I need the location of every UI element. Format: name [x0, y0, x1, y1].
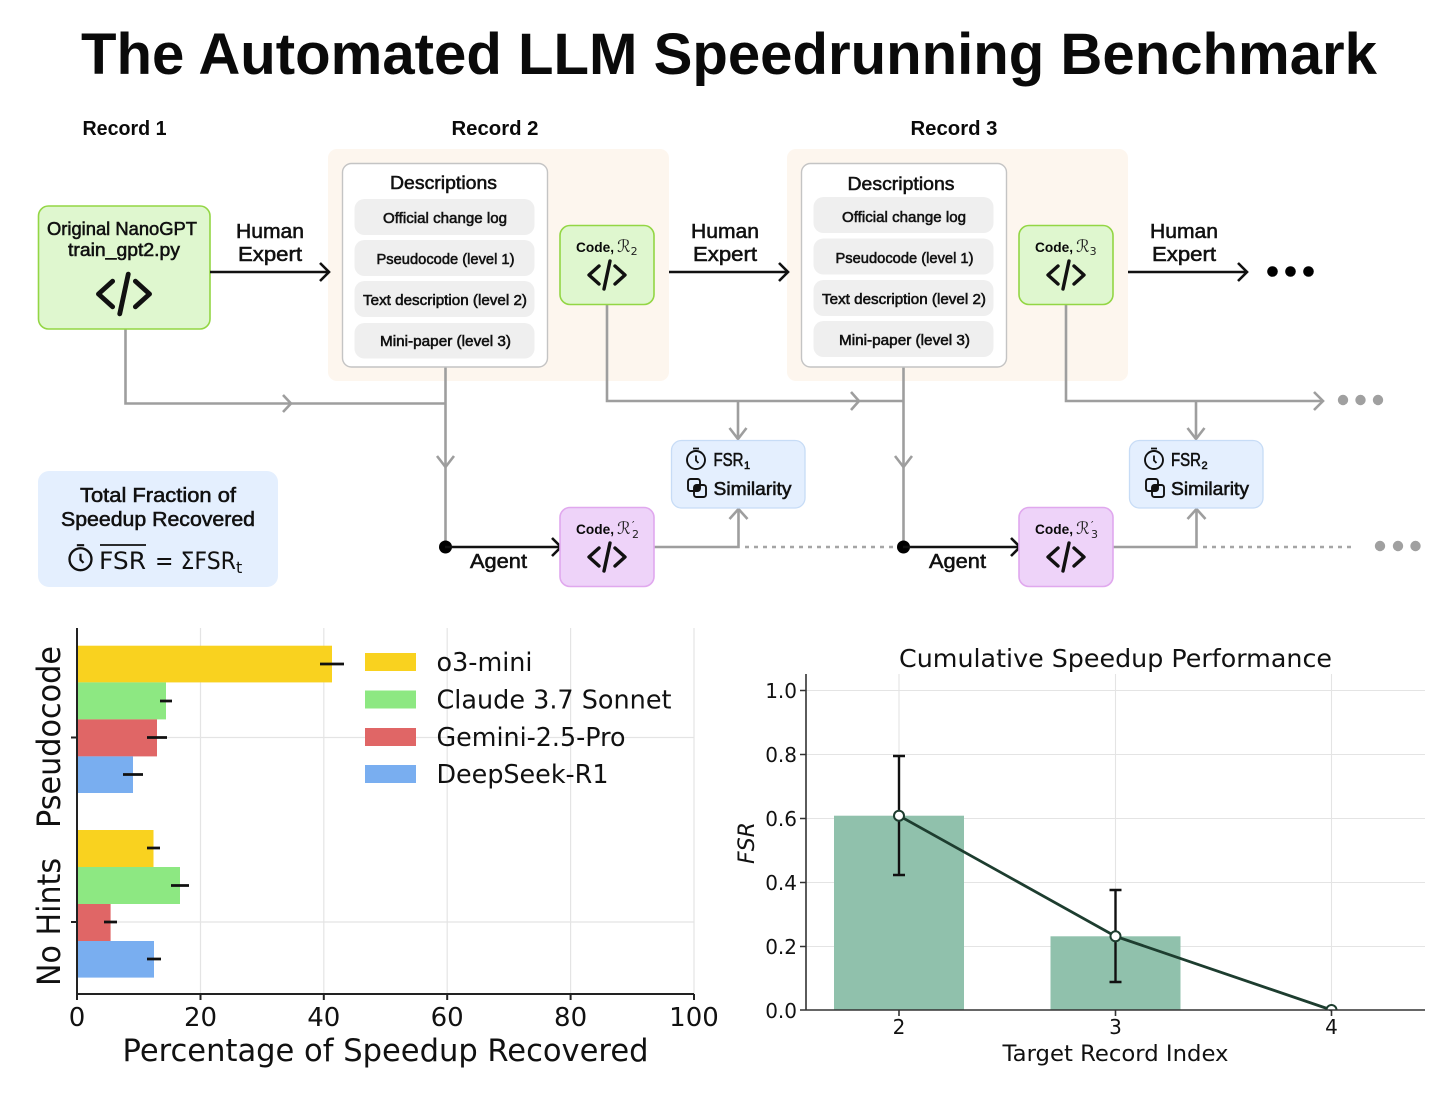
- box: code R3 prime: ℛ: [1076, 519, 1090, 539]
- y tick labels: 0.4: [765, 871, 797, 895]
- y tick labels: 0.2: [765, 935, 797, 959]
- legend: Gemini-2.5-Pro: [436, 723, 626, 753]
- icon: code: [98, 274, 150, 314]
- panel: total fraction of speedup: = ΣFSR: [155, 547, 236, 575]
- x tick labels: 40: [307, 1003, 340, 1033]
- arrow: human expert 1: Expert: [238, 244, 302, 266]
- error bars: [104, 664, 344, 959]
- panel: descriptions record 2: Pseudocode (level 1): [376, 252, 514, 268]
- box: code R2: Code,: [576, 239, 614, 255]
- arrow: human expert 3: Human: [1150, 221, 1218, 243]
- heading: Record 1: Record 1: [82, 118, 166, 140]
- box: code R3: 3: [1090, 245, 1097, 258]
- ellipsis: bottom row: [1375, 541, 1421, 551]
- x tick labels: 3: [1109, 1015, 1122, 1039]
- box: Original NanoGPT: [38, 206, 210, 329]
- x axis label: Target Record Index: [1001, 1042, 1228, 1067]
- bars: [834, 816, 1180, 1010]
- box: FSR 2 and similarity: 2: [1202, 460, 1208, 472]
- icon: code: [1048, 543, 1084, 571]
- panel: total fraction of speedup: t: [236, 558, 242, 577]
- heading: Record 3: Record 3: [910, 118, 998, 140]
- icon: code: [1048, 261, 1084, 289]
- panel: descriptions record 3: Descriptions: [848, 174, 954, 194]
- arrow: human expert 3: [1128, 221, 1247, 281]
- panel: descriptions record 2: Text description (level 2): [363, 293, 527, 309]
- arrow: human expert 1: [210, 221, 329, 281]
- box: code R2 prime: [560, 508, 654, 586]
- ellipsis: middle row: [1338, 395, 1383, 405]
- box: Original NanoGPT: train_gpt2.py: [68, 240, 180, 261]
- x tick labels: 0: [69, 1003, 85, 1033]
- box: code R2: ℛ: [617, 237, 631, 257]
- box: FSR 1 and similarity: FSR: [714, 450, 744, 470]
- box: code R3 prime: Code,: [1035, 521, 1073, 537]
- legend: DeepSeek-R1: [436, 760, 608, 790]
- bar chart: percentage of speedup recovered: [30, 628, 719, 1069]
- y axis label: FSR: [735, 822, 760, 864]
- icon: stopwatch: [687, 448, 705, 469]
- icon: similarity: [1146, 479, 1164, 497]
- agent arrow 1: [439, 538, 561, 573]
- arrow: human expert 2: Human: [691, 221, 759, 243]
- y tick labels: [765, 679, 797, 1023]
- panel: total fraction of speedup: Speedup Recovered: [61, 509, 255, 531]
- connectors: gray flow lines: [126, 304, 1355, 547]
- arrow: human expert 1: Human: [236, 221, 304, 243]
- y tick labels: 0.8: [765, 743, 797, 767]
- chart title: Cumulative Speedup Performance: [899, 644, 1332, 673]
- x tick labels: [893, 1015, 1338, 1039]
- box: FSR 1 and similarity: 1: [744, 460, 750, 472]
- agent arrow 1: Agent: [470, 551, 527, 573]
- panel: descriptions record 2: Official change log: [383, 211, 507, 227]
- panel: total fraction of speedup: Total Fraction of: [80, 485, 236, 507]
- box: code R2 prime: ′: [632, 519, 635, 532]
- icon: stopwatch: [70, 545, 91, 570]
- box: code R2 prime: ℛ: [617, 519, 631, 539]
- panel: descriptions record 2: Descriptions: [390, 173, 497, 193]
- box: code R3 prime: [1019, 508, 1113, 586]
- x tick labels: 4: [1325, 1015, 1338, 1039]
- x axis label: Percentage of Speedup Recovered: [122, 1033, 648, 1069]
- y tick labels: 0.0: [765, 999, 797, 1023]
- box: FSR 2 and similarity: [1130, 440, 1263, 508]
- panel: descriptions record 2: Mini-paper (level 3): [380, 334, 511, 350]
- box: FSR 2 and similarity: Similarity: [1171, 479, 1249, 499]
- icon: code: [589, 261, 625, 289]
- y tick labels: 0.6: [765, 807, 797, 831]
- box: code R3: [1019, 226, 1113, 304]
- arrow: human expert 2: Expert: [693, 244, 757, 266]
- box: FSR 1 and similarity: Similarity: [714, 479, 792, 499]
- panel: descriptions record 2: [342, 164, 548, 367]
- heading: Record 2: Record 2: [452, 118, 538, 140]
- x tick labels: 60: [431, 1003, 464, 1033]
- box: code R2 prime: Code,: [576, 521, 614, 537]
- legend: [365, 648, 672, 790]
- x tick labels: 100: [669, 1003, 719, 1033]
- box: Original NanoGPT: Original NanoGPT: [47, 219, 197, 239]
- icon: code: [589, 543, 625, 571]
- x tick labels: 2: [893, 1015, 905, 1039]
- x tick labels: [69, 1003, 719, 1033]
- panel: descriptions record 3: [802, 164, 1006, 367]
- legend: Claude 3.7 Sonnet: [436, 686, 672, 716]
- box: code R3: ℛ: [1076, 237, 1090, 257]
- title: The Automated LLM Speedrunning Benchmark: [81, 22, 1378, 87]
- agent arrow 2: [897, 538, 1020, 573]
- panel: descriptions record 3: Mini-paper (level 3): [839, 333, 970, 349]
- axes: [71, 628, 694, 1000]
- y category label: Pseudocode: Pseudocode: [30, 646, 68, 828]
- icon: similarity: [688, 479, 706, 497]
- x tick labels: 80: [554, 1003, 587, 1033]
- panel: record 2 background: [328, 149, 669, 381]
- box: FSR 2 and similarity: FSR: [1171, 450, 1201, 470]
- panel: descriptions record 3: Text description (level 2): [822, 292, 986, 308]
- arrow: human expert 3: Expert: [1152, 244, 1216, 266]
- box: code R3: Code,: [1035, 239, 1073, 255]
- box: code R2: [560, 226, 654, 304]
- panel: total fraction of speedup: [38, 471, 278, 587]
- bars: no hints group: [77, 830, 180, 978]
- axes: [800, 674, 1425, 1016]
- box: code R3 prime: 3: [1091, 528, 1098, 541]
- icon: stopwatch: [1145, 448, 1163, 469]
- ellipsis: top row: [1267, 266, 1314, 277]
- legend: o3-mini: [436, 648, 532, 678]
- bars: pseudocode group: [77, 646, 332, 793]
- box: code R2 prime: 2: [632, 528, 639, 541]
- x tick labels: 20: [184, 1003, 217, 1033]
- panel: descriptions record 3: Pseudocode (level 1): [836, 251, 974, 267]
- chart: cumulative speedup performance: [735, 644, 1425, 1067]
- panel: total fraction of speedup: FSR: [99, 547, 146, 575]
- y category label: No Hints: No Hints: [30, 858, 68, 986]
- line series and error bars: [893, 756, 1336, 1015]
- box: code R3 prime: ′: [1091, 519, 1094, 532]
- agent arrow 2: Agent: [929, 551, 986, 573]
- panel: descriptions record 3: Official change log: [842, 210, 966, 226]
- y tick labels: 1.0: [765, 679, 797, 703]
- box: FSR 1 and similarity: [672, 440, 805, 508]
- panel: record 3 background: [787, 149, 1128, 381]
- box: code R2: 2: [631, 245, 638, 258]
- arrow: human expert 2: [669, 221, 788, 281]
